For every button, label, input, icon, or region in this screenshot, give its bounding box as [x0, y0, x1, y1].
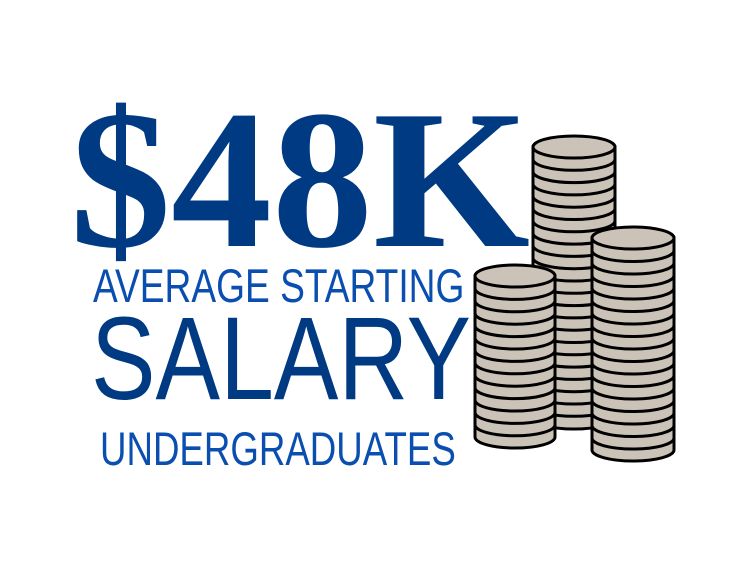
subtitle: average starting: AVERAGE STARTING [93, 259, 464, 312]
heading: salary: SALARY [91, 293, 471, 425]
right stack [592, 227, 674, 461]
left stack [475, 265, 555, 448]
subtitle: undergraduates: UNDERGRADUATES [100, 422, 456, 475]
middle stack [533, 136, 615, 429]
title: $48K: $48K [70, 70, 530, 289]
